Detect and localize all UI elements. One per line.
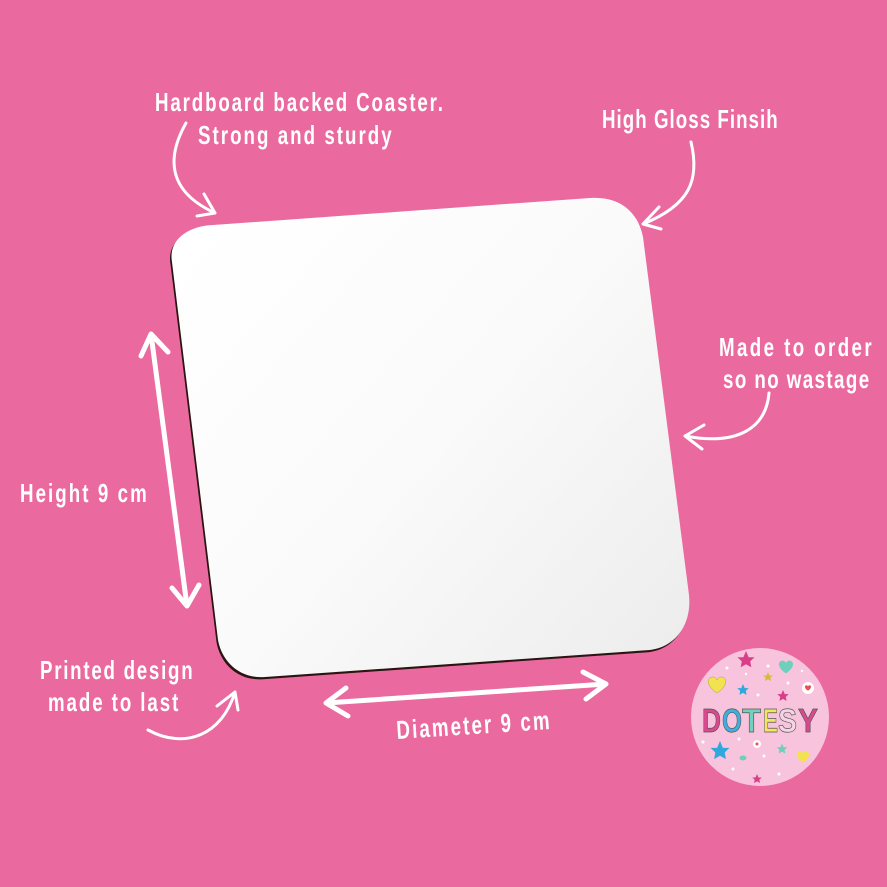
callout: high gloss finish: High Gloss Finsih [602, 104, 778, 134]
icon: logo decorations [702, 651, 814, 783]
callout: hardboard backed coaster [155, 87, 443, 216]
height dimension: Height 9 cm [20, 478, 147, 508]
callout: hardboard backed coaster: Strong and sturdy [198, 120, 392, 150]
callout: made to order [685, 332, 872, 449]
callout: hardboard backed coaster: Hardboard backed Coaster. [155, 87, 443, 117]
callout: made to order: Made to order [719, 332, 872, 362]
height dimension [20, 334, 199, 606]
logo wordmark: Y [798, 702, 818, 739]
logo: Dotesy badge [691, 648, 829, 786]
callout: printed design [40, 655, 238, 739]
logo wordmark: T [742, 702, 761, 739]
callout: printed design: Printed design [40, 655, 193, 685]
callout: high gloss finish [602, 104, 778, 229]
logo wordmark [702, 702, 818, 739]
diameter dimension: Diameter 9 cm [395, 705, 550, 745]
callout: made to order: so no wastage [723, 364, 869, 394]
coaster [170, 198, 689, 679]
logo wordmark: E [763, 702, 778, 739]
logo wordmark: D [702, 702, 721, 739]
callout: printed design: made to last [48, 687, 179, 717]
logo wordmark: O [722, 702, 742, 739]
diameter dimension [326, 672, 606, 745]
logo wordmark: S [778, 702, 797, 739]
